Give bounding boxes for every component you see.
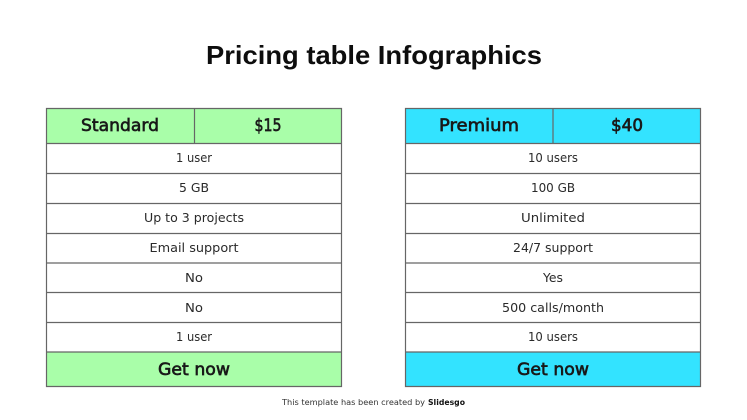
standard features: 5 GB xyxy=(179,180,209,195)
standard call to action xyxy=(46,352,342,387)
standard features: Email support xyxy=(150,240,239,255)
premium features: 100 GB xyxy=(531,180,575,195)
premium features: Yes xyxy=(542,270,563,285)
panel: standard pricing table xyxy=(46,108,342,387)
standard header: Standard xyxy=(81,116,159,136)
premium features: 10 users xyxy=(528,329,578,344)
premium features: 24/7 support xyxy=(513,240,593,255)
footer credit: Slidesgo xyxy=(428,398,465,407)
premium features: 10 users xyxy=(528,150,578,165)
panel: premium pricing table xyxy=(405,108,701,387)
standard features xyxy=(144,150,244,344)
premium header: $40 xyxy=(611,116,643,136)
standard features: 1 user xyxy=(176,150,213,165)
standard header: $15 xyxy=(254,116,282,136)
footer credit: This template has been created by xyxy=(281,398,425,407)
standard call to action: Get now xyxy=(158,360,230,380)
standard features: Up to 3 projects xyxy=(144,210,244,225)
standard features: 1 user xyxy=(176,329,213,344)
standard header xyxy=(46,108,342,143)
premium call to action xyxy=(405,352,701,387)
standard features: No xyxy=(185,270,203,285)
premium features: Unlimited xyxy=(521,210,585,225)
premium features: 500 calls/month xyxy=(502,300,604,315)
premium features xyxy=(502,150,604,344)
premium header xyxy=(405,108,701,143)
title: Pricing table Infographics xyxy=(206,40,542,70)
premium header: Premium xyxy=(439,116,519,136)
premium call to action: Get now xyxy=(517,360,589,380)
standard features: No xyxy=(185,300,203,315)
